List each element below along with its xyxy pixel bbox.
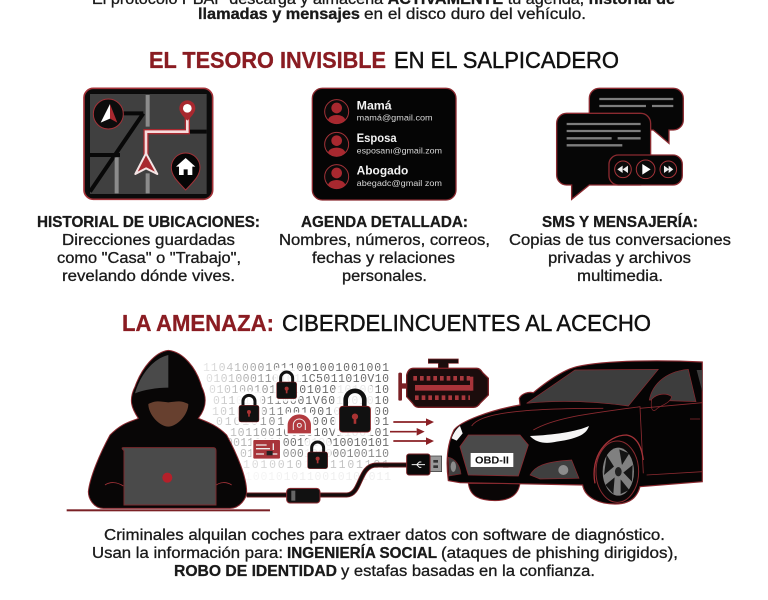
text block: sms y mensajeria — [509, 214, 731, 285]
icon: id card — [251, 438, 282, 460]
text block: historial de ubicaciones: revelando dónde vives. — [62, 268, 235, 285]
heading: el tesoro invisible: EN EL SALPICADERO — [394, 47, 619, 73]
binary code background — [203, 362, 391, 484]
binary code background: 00110101001010010010101 — [226, 437, 389, 450]
text block: agenda detallada: Nombres, números, correos, — [279, 232, 490, 249]
icon: chat bubbles and media player — [557, 88, 683, 199]
grille — [460, 435, 528, 476]
icon: contact card — [312, 88, 456, 200]
heading: la amenaza: LA AMENAZA: — [122, 310, 274, 336]
icon: USB plug — [407, 454, 442, 475]
text block: agenda detallada — [279, 214, 490, 285]
side window — [649, 369, 696, 402]
contact: Mamá: mamá@gmail.com — [357, 113, 433, 123]
binary code background: 011011000101000100110 — [240, 448, 389, 461]
body lines — [472, 403, 702, 475]
binary code background: 1001010110010101011 — [245, 471, 391, 484]
illustration: car with OBD-II plate — [447, 361, 702, 504]
front wheel — [594, 435, 643, 502]
text block: sms y mensajeria: SMS Y MENSAJERÍA: — [542, 214, 698, 231]
contact: Mamá: Mamá — [357, 99, 392, 112]
license plate — [471, 453, 513, 467]
text block: historial de ubicaciones: HISTORIAL DE UBICACIONES: — [37, 214, 260, 231]
USB cable — [247, 465, 430, 503]
binary code background: 1010010110010010110700 — [212, 406, 389, 419]
text block: threat description: Criminales alquilan coches para extraer datos con software de diagnóstico. — [104, 527, 665, 544]
binary code background: 010100101101010101010010 — [209, 384, 389, 397]
text block: threat description: INGENIERÍA SOCIAL — [287, 545, 437, 562]
text block: agenda detallada: AGENDA DETALLADA: — [301, 214, 468, 231]
binary code background: 01010001101011C5011010V10 — [206, 373, 389, 386]
icon: OBD connector — [398, 359, 488, 407]
fog lights — [448, 457, 461, 476]
intro text — [92, 0, 675, 23]
contact: Esposa: esposanı@gmail.zom — [357, 145, 442, 155]
headlights — [530, 426, 589, 443]
intro text: llamadas y mensajes — [198, 6, 360, 23]
table line — [67, 509, 270, 511]
intro text: en el disco duro del vehículo. — [364, 6, 586, 23]
icon: fingerprint badge — [285, 413, 314, 435]
text block: agenda detallada: personales. — [342, 268, 427, 285]
contact: Esposa — [325, 132, 442, 156]
text block: historial de ubicaciones — [37, 214, 260, 285]
mirror — [651, 394, 672, 411]
laptop — [122, 448, 216, 505]
icon: navigation map — [84, 88, 213, 199]
binary code background: 1011001001010V1100101 — [230, 427, 389, 440]
text block: threat description — [92, 527, 678, 580]
illustration: hooded hacker at laptop — [67, 350, 270, 511]
text block: agenda detallada: fechas y relaciones — [312, 250, 455, 267]
arrows: data flow — [390, 418, 434, 445]
license plate: OBD-II — [475, 456, 509, 467]
binary code background: 110410001011001001001001 — [203, 362, 389, 375]
heading: la amenaza: CIBERDELINCUENTES AL ACECHO — [282, 310, 651, 336]
contact: Abogado: abegadc@gmail zom — [357, 178, 442, 188]
contact: Esposa: Esposa — [357, 132, 397, 145]
binary code background: 10100101101101101 — [243, 459, 389, 472]
binary code background: 0110110110001V601001010 — [213, 395, 389, 408]
text block: threat description: Usan la información para: — [92, 545, 283, 562]
text block: sms y mensajeria: multimedia. — [577, 268, 663, 285]
text block: sms y mensajeria: Copias de tus conversaciones — [509, 232, 731, 249]
windshield — [527, 369, 658, 406]
text block: threat description: ROBO DE IDENTIDAD — [174, 563, 337, 580]
contact: Mamá — [325, 99, 433, 124]
icon: padlocks — [236, 368, 376, 471]
text block: sms y mensajeria: privadas y archivos — [548, 250, 691, 267]
heading: el tesoro invisible: EL TESORO INVISIBLE — [149, 47, 386, 73]
text block: threat description: y estafas basadas en la confianza. — [341, 563, 595, 580]
text block: historial de ubicaciones: como "Casa" o "Trabajo", — [57, 250, 241, 267]
binary code background: 01010101101000100101 — [216, 416, 389, 429]
text block: threat description: (ataques de phishing dirigidos), — [441, 545, 678, 562]
text block: historial de ubicaciones: Direcciones guardadas — [62, 232, 235, 249]
contact: Abogado — [325, 165, 442, 189]
contact: Abogado: Abogado — [357, 165, 408, 178]
